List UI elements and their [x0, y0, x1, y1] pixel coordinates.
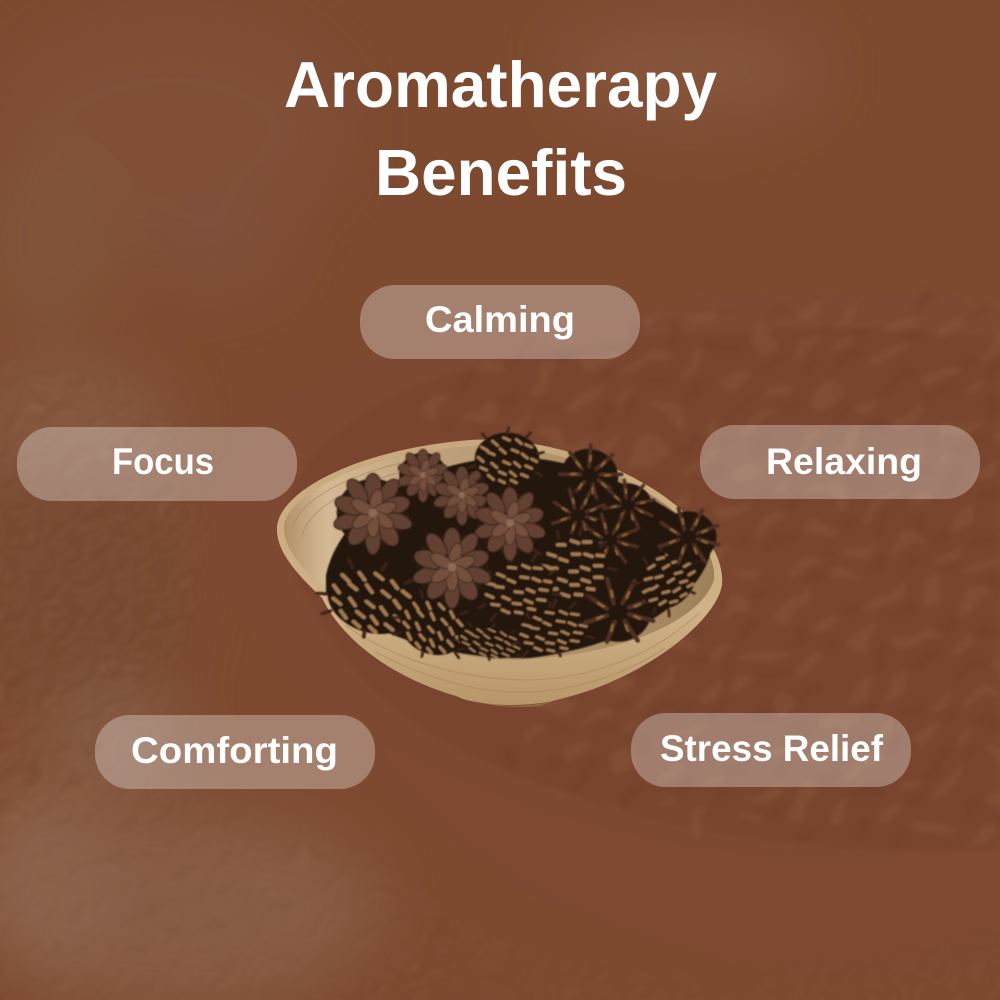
pill: Stress Relief: Stress Relief — [660, 728, 884, 769]
pill: Focus: Focus — [112, 441, 214, 482]
title: Aromatherapy — [284, 48, 717, 121]
bowl of pinecones — [277, 428, 722, 707]
pill: Relaxing: Relaxing — [766, 441, 922, 482]
pill: Calming: Calming — [425, 299, 575, 340]
background: large bowl silhouette — [207, 293, 1000, 972]
bowl foot — [462, 697, 556, 707]
title: Benefits — [375, 136, 627, 209]
bowl rings — [293, 456, 700, 692]
pill: Stress Relief — [631, 713, 911, 787]
title — [284, 48, 717, 209]
bowl interior — [284, 446, 714, 660]
background: ghost foliage — [0, 358, 1000, 1000]
pill: Calming — [360, 285, 640, 359]
pill: Comforting — [95, 715, 375, 789]
pill: Focus — [17, 427, 297, 501]
pill: Comforting: Comforting — [131, 730, 338, 771]
pill: Relaxing — [700, 425, 980, 499]
pinecones — [309, 428, 718, 672]
background: ghost pinecones — [400, 296, 1000, 846]
bowl body — [277, 440, 722, 705]
